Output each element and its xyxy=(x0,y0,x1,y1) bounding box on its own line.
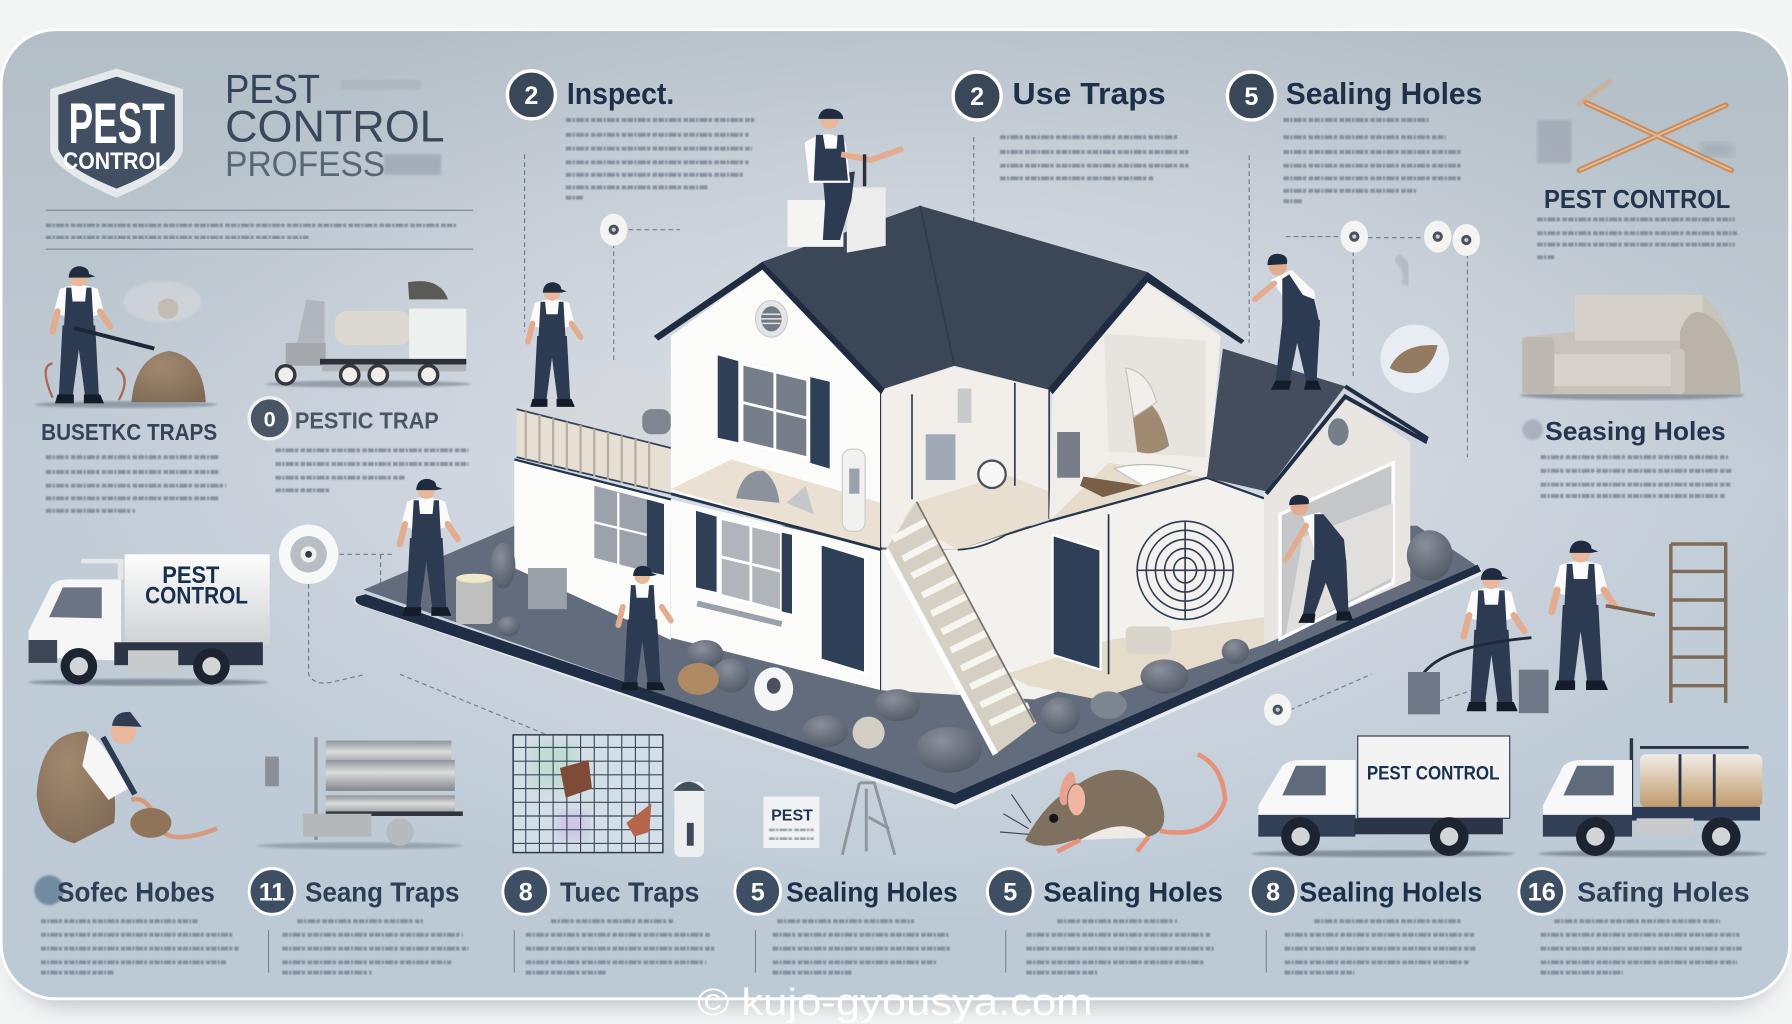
grid trap xyxy=(513,735,663,853)
step: inspect heading xyxy=(507,71,674,119)
bottom step 7: 16 xyxy=(1528,879,1556,907)
equipment cart xyxy=(265,281,471,387)
equipment cylinders xyxy=(257,737,463,849)
text block: inspect xyxy=(566,120,754,198)
bottom step 2: Seang Traps xyxy=(305,877,459,908)
title: PROFESS xyxy=(225,144,385,184)
worker on balcony xyxy=(528,282,581,407)
step: sealing holes heading: 5 xyxy=(1244,83,1258,111)
upper floor objects xyxy=(736,449,865,531)
worker with rock xyxy=(618,566,671,690)
text block: use traps xyxy=(1000,137,1189,178)
pest booklet: PEST xyxy=(771,808,813,825)
fan grille xyxy=(1137,521,1233,619)
main roof xyxy=(654,206,1245,394)
bottom step 5: Sealing Holes xyxy=(1043,877,1223,908)
bottom step 7 xyxy=(1519,869,1750,973)
heading: busetkc traps: BUSETKC TRAPS xyxy=(41,419,217,445)
bottom step 3: 8 xyxy=(519,879,533,907)
bottom step 1: Sofec Hobes xyxy=(57,877,215,908)
truck: pest control left: CONTROL xyxy=(145,582,248,609)
title xyxy=(225,66,445,184)
bottom step 3 xyxy=(503,869,714,973)
icon: sofa xyxy=(1520,295,1744,400)
truck: pest control left xyxy=(29,554,270,686)
chimney xyxy=(787,187,886,253)
step: inspect heading: Inspect. xyxy=(567,76,674,111)
step: inspect heading: 2 xyxy=(524,82,538,110)
main gable walls xyxy=(671,270,881,690)
bottom step 4: 5 xyxy=(751,879,765,907)
bottom step 1 xyxy=(34,875,240,973)
step: use traps heading: 2 xyxy=(970,83,984,111)
icon: crossed copper rods xyxy=(1537,80,1733,170)
step: use traps heading xyxy=(953,72,1166,120)
bottom step 6 xyxy=(1250,869,1482,973)
worker on roof xyxy=(1255,254,1321,390)
ground platform xyxy=(354,526,1481,809)
lower interior xyxy=(881,478,1264,699)
heading: seasing holes right: Seasing Holes xyxy=(1545,416,1726,446)
inner door xyxy=(1053,535,1101,670)
text block: pest control right xyxy=(1537,219,1737,257)
connectors and markers xyxy=(269,137,1486,973)
truck: pest control left: PEST xyxy=(162,562,220,589)
truck: pest control middle xyxy=(1251,736,1514,857)
lower window and shutters xyxy=(696,511,792,624)
garage xyxy=(1207,349,1426,645)
truck: tanker right xyxy=(1538,738,1767,857)
staircase xyxy=(886,502,1037,754)
bottom step 6: 8 xyxy=(1266,879,1280,907)
icon: floor target xyxy=(754,667,793,711)
step: sealing holes heading xyxy=(1227,72,1482,120)
worker on chimney xyxy=(805,109,903,240)
text block: seasing holes right xyxy=(1541,457,1731,496)
heading: pest control right: PEST CONTROL xyxy=(1544,184,1730,214)
watermark: © kujo-gyousya.com xyxy=(697,981,1093,1023)
bottom step 3: Tuec Traps xyxy=(560,877,699,908)
worker on platform left xyxy=(400,479,458,616)
icon: pest control shield logo xyxy=(50,69,183,198)
bottom step 4 xyxy=(735,869,958,973)
balcony railing xyxy=(517,360,671,494)
upper window and shutters xyxy=(718,355,830,469)
worker with stick and rat mound xyxy=(34,266,217,408)
lower left wall xyxy=(514,459,671,640)
bottom step 6: Sealing Holels xyxy=(1299,877,1482,908)
worker in garage xyxy=(1286,495,1353,623)
title: PEST xyxy=(225,66,320,112)
pest booklet xyxy=(763,797,819,848)
stepladder xyxy=(842,783,895,855)
kneeling worker with rodent body xyxy=(37,712,217,843)
title: CONTROL xyxy=(225,103,445,152)
bottom step 2: 11 xyxy=(259,879,285,907)
worker with nozzle right xyxy=(1408,568,1549,714)
bottom step 4: Sealing Holes xyxy=(786,877,958,908)
cylinder device xyxy=(673,782,705,857)
step: use traps heading: Use Traps xyxy=(1013,76,1166,111)
bottom step 7: Safing Holes xyxy=(1577,877,1750,908)
bottom step 5 xyxy=(987,869,1223,973)
worker with ladder xyxy=(1552,541,1726,703)
icon: pest control shield logo: CONTROL xyxy=(63,148,168,175)
interior upper middle xyxy=(881,367,1049,550)
illustration: isometric house xyxy=(354,187,1481,809)
interior upper right room xyxy=(1049,282,1221,519)
text block: busetkc traps xyxy=(46,457,226,511)
icon: pest control shield logo: PEST xyxy=(69,92,165,156)
text block: pestic trap xyxy=(275,450,469,490)
front door xyxy=(821,544,865,673)
text block: intro xyxy=(46,210,473,249)
step: sealing holes heading: Sealing Holes xyxy=(1286,76,1482,111)
bottom step 2 xyxy=(249,869,469,973)
trash can xyxy=(456,574,493,624)
heading: pestic trap: 0 xyxy=(264,406,276,431)
icon: bug callout circle xyxy=(1381,325,1449,393)
heading: pestic trap: PESTIC TRAP xyxy=(295,408,439,434)
rat xyxy=(1000,754,1225,851)
truck: pest control middle: PEST CONTROL xyxy=(1367,762,1500,784)
roof vent xyxy=(755,301,787,337)
icon: target callout with connector xyxy=(279,525,394,683)
rocks and debris xyxy=(490,530,1453,773)
bottom step 5: 5 xyxy=(1003,879,1017,907)
text block: sealing holes xyxy=(1283,120,1463,201)
heading: pestic trap xyxy=(249,398,439,439)
